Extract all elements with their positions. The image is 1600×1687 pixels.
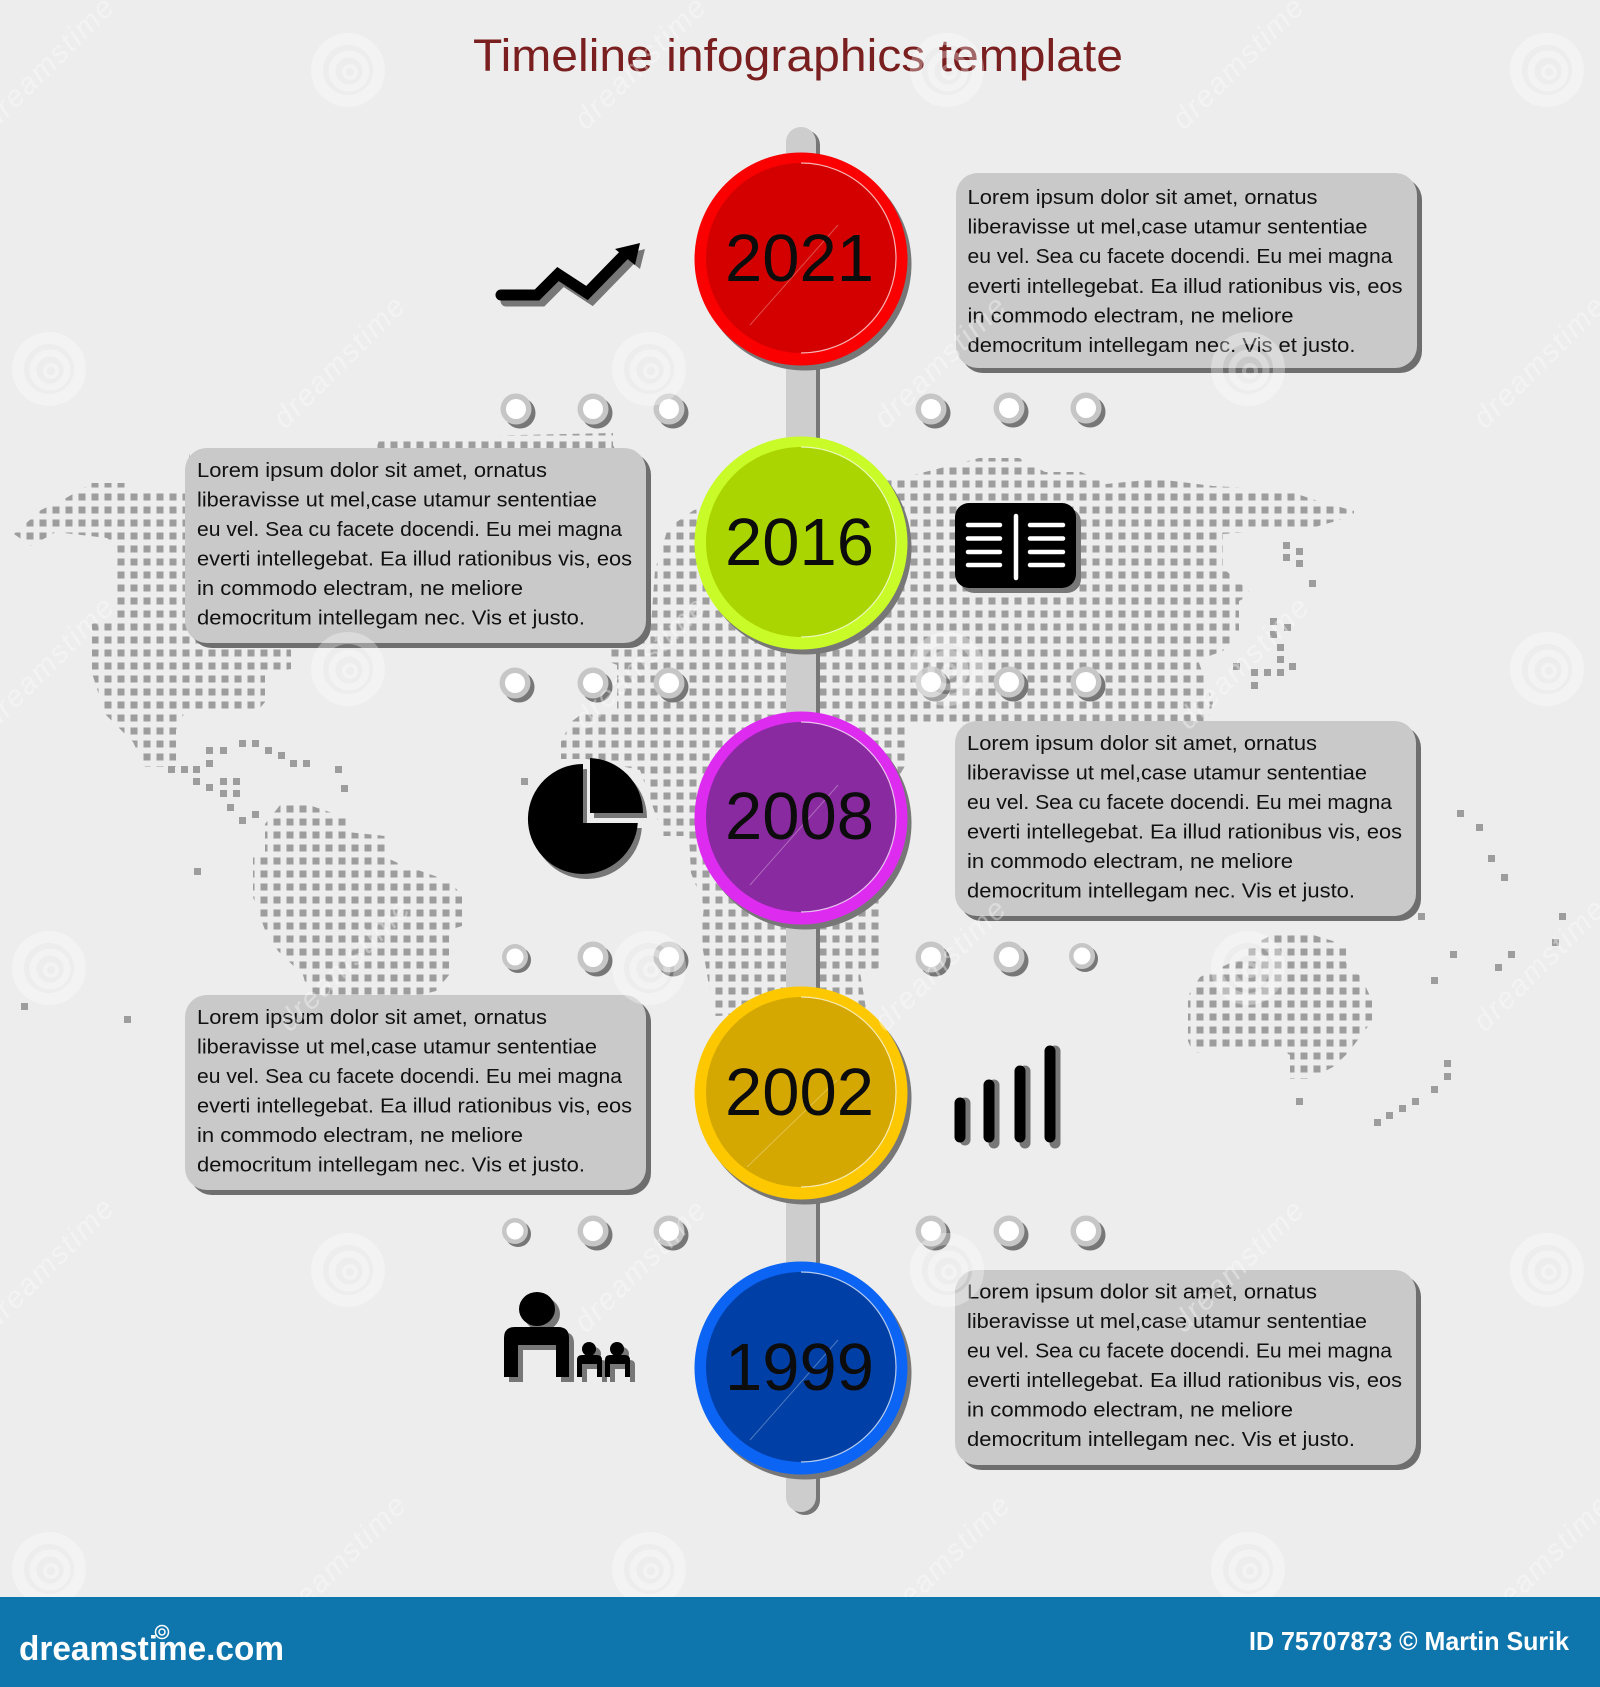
text box 2002: democritum intellegam nec. Vis et justo. <box>197 1154 585 1176</box>
text box 2008: Lorem ipsum dolor sit amet, ornatus <box>967 732 1317 755</box>
text box 2021: liberavisse ut mel,case utamur sententiae <box>968 216 1368 238</box>
watermark text: dreamstime <box>872 1489 1017 1634</box>
text box 1999: in commodo electram, ne meliore <box>967 1398 1293 1422</box>
footer logo text: dreamstime.com <box>19 1630 284 1668</box>
text box 2008 <box>955 721 1421 921</box>
text box 2016: Lorem ipsum dolor sit amet, ornatus <box>197 459 547 482</box>
text box 2016: liberavisse ut mel,case utamur sententiae <box>197 488 597 512</box>
year circle 1999 <box>694 1262 912 1480</box>
text box 2016: democritum intellegam nec. Vis et justo. <box>197 606 585 630</box>
icon: book <box>955 503 1081 593</box>
watermark text: dreamstime <box>568 1194 713 1339</box>
year circle 2002 <box>694 986 912 1204</box>
year circle 2016: 2016 <box>725 505 874 580</box>
text box 2016 <box>185 448 651 648</box>
footer band <box>0 1597 1600 1687</box>
text box 1999 <box>955 1270 1421 1470</box>
footer credit: ID 75707873 © Martin Surik <box>1249 1626 1570 1656</box>
watermark text: dreamstime <box>272 893 417 1038</box>
text box 2021: in commodo electram, ne meliore <box>968 304 1294 328</box>
year circle 2016 <box>694 436 912 654</box>
text box 1999: democritum intellegam nec. Vis et justo. <box>967 1428 1355 1451</box>
text box 2008: eu vel. Sea cu facete docendi. Eu mei magna <box>967 791 1393 814</box>
watermark text: dreamstime <box>868 893 1013 1038</box>
text box 2021: everti intellegebat. Ea illud rationibus vis, eos <box>968 275 1402 298</box>
connector dots <box>500 392 1106 1250</box>
text box 1999: eu vel. Sea cu facete docendi. Eu mei magna <box>967 1340 1393 1362</box>
text box 2008: democritum intellegam nec. Vis et justo. <box>967 880 1355 902</box>
text box 2016: in commodo electram, ne meliore <box>197 577 523 600</box>
text box 2002 <box>185 995 651 1195</box>
text box 2021: eu vel. Sea cu facete docendi. Eu mei magna <box>968 245 1393 268</box>
text box 2016: eu vel. Sea cu facete docendi. Eu mei magna <box>197 518 623 541</box>
text box 2002: liberavisse ut mel,case utamur sententiae <box>197 1036 597 1058</box>
text box 2016: everti intellegebat. Ea illud rationibus vis, eos <box>197 548 632 570</box>
year circle 1999: 1999 <box>725 1330 874 1405</box>
watermark text: dreamstime <box>1171 591 1316 736</box>
year circle 2021 <box>694 152 912 370</box>
dotted world map <box>14 433 1566 1126</box>
year circle 2021: 2021 <box>725 221 874 296</box>
timeline bar <box>786 127 820 1515</box>
text box 1999: everti intellegebat. Ea illud rationibus vis, eos <box>967 1369 1402 1392</box>
watermark text: dreamstime <box>868 290 1013 435</box>
icon: trend arrow <box>501 243 645 301</box>
text box 2002: eu vel. Sea cu facete docendi. Eu mei magna <box>197 1065 623 1088</box>
watermark text: dreamstime <box>568 591 713 736</box>
footer logo spiral <box>156 1626 168 1638</box>
watermark text: dreamstime <box>268 1489 413 1634</box>
watermark text: dreamstime <box>267 290 412 435</box>
year circle 2002: 2002 <box>725 1055 874 1130</box>
icon: pie chart <box>528 758 647 879</box>
text box 2002: Lorem ipsum dolor sit amet, ornatus <box>197 1006 547 1029</box>
text box 1999: liberavisse ut mel,case utamur sententiae <box>967 1310 1367 1333</box>
icon: bar chart <box>960 1051 1055 1143</box>
text box 2021: Lorem ipsum dolor sit amet, ornatus <box>968 186 1318 209</box>
text box 2008: in commodo electram, ne meliore <box>967 850 1293 873</box>
text box 2002: everti intellegebat. Ea illud rationibus vis, eos <box>197 1094 632 1118</box>
text box 2008: everti intellegebat. Ea illud rationibus vis, eos <box>967 820 1402 844</box>
text box 2002: in commodo electram, ne meliore <box>197 1124 523 1147</box>
watermark text: dreamstime <box>1166 1194 1311 1339</box>
year circle 2008 <box>694 712 912 930</box>
text box 2008: liberavisse ut mel,case utamur sententiae <box>967 762 1367 784</box>
icon: people <box>504 1292 635 1382</box>
text box 2021 <box>956 173 1422 373</box>
year circle 2008: 2008 <box>725 779 874 854</box>
text box 1999: Lorem ipsum dolor sit amet, ornatus <box>967 1280 1317 1304</box>
text box 2021: democritum intellegam nec. Vis et justo. <box>968 334 1356 357</box>
title: Timeline infographics template <box>473 30 1123 81</box>
